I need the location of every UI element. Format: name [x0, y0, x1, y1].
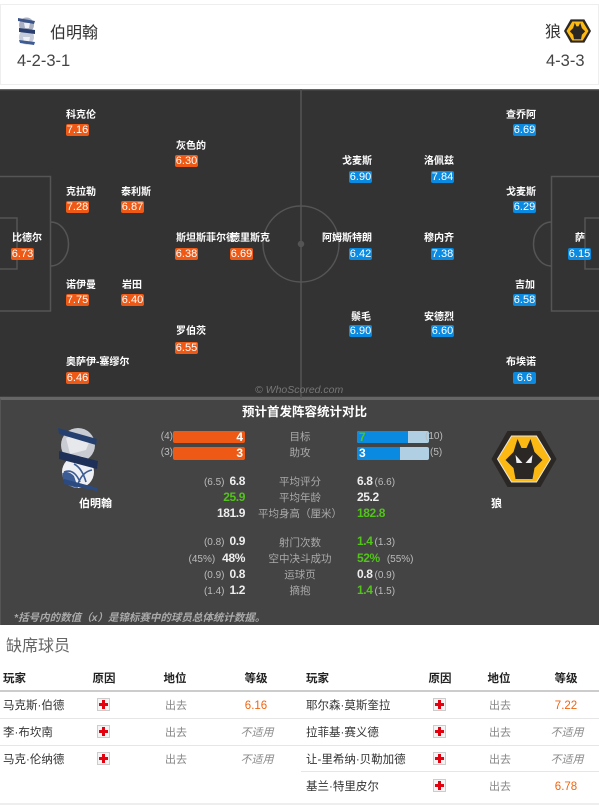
player: 鬃毛: 鬃毛 — [351, 312, 371, 323]
player: 戈麦斯 (left): 6.90 — [350, 171, 371, 183]
player: 阿姆斯特朗: 阿姆斯特朗 — [322, 233, 372, 244]
player: 德里斯克: 德里斯克 — [230, 233, 270, 244]
row home 1: 6.16 — [245, 700, 267, 712]
player: 斯坦斯菲尔德: 斯坦斯菲尔德 — [176, 233, 236, 244]
stat label: 射门次数: 射门次数 — [279, 537, 321, 549]
bar note: goals home: (4) — [161, 431, 173, 442]
player: 洛佩兹: 7.84 — [432, 171, 453, 183]
player: 比德尔 — [11, 232, 42, 260]
team label: away: 狼 — [491, 498, 502, 510]
formation: home: 4-2-3-1 — [17, 52, 70, 70]
table header: rating home: 等级 — [244, 673, 268, 685]
row home 3 — [3, 752, 274, 766]
player: 奥萨伊-塞缪尔: 6.46 — [67, 372, 88, 384]
player: 穆内齐: 7.38 — [432, 248, 453, 260]
bar: goals home: 4 — [236, 430, 243, 444]
player: 戈麦斯 (right): 戈麦斯 — [506, 187, 536, 198]
row home 2: 出去 — [165, 727, 187, 739]
player: 安德烈: 安德烈 — [424, 312, 454, 323]
icon: Wolves crest small — [564, 19, 591, 43]
stat row home: dribbles: (0.9) 0.8 — [204, 567, 245, 581]
player: 阿姆斯特朗: 6.42 — [350, 248, 371, 260]
stat row away: age: 25.2 — [357, 490, 379, 504]
row home 3: 马克·伦纳德 — [3, 754, 64, 766]
row away 1: 耶尔森·莫斯奎拉 — [306, 700, 390, 712]
player: 岩田: 6.40 — [122, 294, 143, 306]
stat label: 平均年龄: 平均年龄 — [279, 492, 321, 504]
player: 戈麦斯 (right) — [506, 186, 536, 213]
row away 2: 不适用 — [550, 727, 584, 739]
player: 克拉勒: 7.28 — [67, 201, 88, 213]
stats title: 预计首发阵容统计对比 — [242, 405, 367, 419]
bar: assists away — [357, 447, 429, 460]
table header: player home: 玩家 — [3, 673, 26, 685]
bar note: assists away: (5) — [430, 447, 442, 458]
bar note: assists home: (3) — [161, 447, 173, 458]
player: 灰色的: 灰色的 — [176, 141, 206, 152]
row home 1: 马克斯·伯德 — [3, 700, 64, 712]
player: 泰利斯: 泰利斯 — [121, 187, 151, 198]
team label: home: 伯明翰 — [79, 498, 112, 510]
row home 1 — [3, 698, 267, 712]
watermark: © WhoScored.com — [255, 384, 343, 396]
player: 阿姆斯特朗 — [322, 232, 372, 260]
panel: match header — [0, 4, 599, 85]
row away 3: 出去 — [489, 754, 511, 766]
row away 2 — [300, 726, 599, 740]
player: 诺伊曼 — [66, 279, 96, 306]
stat row away: shots: 1.4(1.3) — [357, 534, 395, 548]
stat label: 平均评分: 平均评分 — [279, 476, 321, 488]
bar: assists home — [173, 447, 245, 460]
stat row away: tackles: 1.4(1.5) — [357, 583, 395, 597]
player: 萨: 6.15 — [569, 248, 590, 260]
row away 3: 让-里希纳·贝勒加德 — [306, 754, 406, 766]
stat row home: age: 25.9 — [223, 490, 245, 504]
row away 2: 拉菲基·赛义德 — [306, 727, 379, 739]
player: 罗伯茨: 6.55 — [176, 342, 197, 354]
row home 1: 出去 — [165, 700, 187, 712]
stat label: 助攻: 助攻 — [290, 447, 310, 459]
player: 岩田 — [121, 279, 144, 306]
player: 灰色的 — [175, 140, 206, 167]
stat label: 平均身高: 平均身高（厘米） — [258, 508, 342, 520]
player: 穆内齐 — [424, 232, 454, 260]
row away 4: 基兰·特里皮尔 — [306, 781, 379, 793]
team name: away: 狼 — [545, 24, 561, 41]
table header: reason away: 原因 — [428, 673, 452, 685]
row away 1 — [300, 699, 599, 713]
player: 罗伯茨: 罗伯茨 — [176, 326, 206, 337]
player: 查乔阿 — [506, 109, 536, 136]
row home 3: 不适用 — [240, 754, 274, 766]
player: 科克伦 — [66, 109, 96, 136]
row away 2: 出去 — [489, 727, 511, 739]
player: 科克伦: 7.16 — [67, 124, 88, 136]
player: 比德尔: 比德尔 — [12, 233, 42, 244]
row away 3 — [300, 753, 599, 767]
player: 泰利斯 — [121, 186, 151, 213]
player: 安德烈 — [424, 311, 454, 337]
row away 4: 出去 — [489, 781, 511, 793]
bar note: goals away: (10) — [425, 431, 443, 442]
stat row home: rating: (6.5) 6.8 — [204, 474, 245, 488]
row away 3: 不适用 — [550, 754, 584, 766]
player: 岩田: 岩田 — [122, 280, 142, 291]
bar: goals home — [173, 431, 245, 443]
player: 奥萨伊-塞缪尔 — [66, 356, 129, 384]
table header: rating away: 等级 — [554, 673, 578, 685]
icon: Birmingham crest large — [58, 428, 98, 491]
player: 布埃诺: 布埃诺 — [506, 357, 536, 368]
stat row home: shots: (0.8) 0.9 — [204, 534, 245, 548]
row away 1: 出去 — [489, 700, 511, 712]
player: 吉加 — [513, 279, 536, 306]
player: 克拉勒: 克拉勒 — [66, 187, 96, 198]
player: 布埃诺: 6.6 — [517, 372, 532, 384]
player: 诺伊曼: 诺伊曼 — [66, 280, 96, 291]
stat row away: dribbles: 0.8(0.9) — [357, 567, 395, 581]
player: 泰利斯: 6.87 — [122, 201, 143, 213]
table header: position away: 地位 — [488, 673, 510, 685]
stat row home: aerial: (45%) 48% — [188, 551, 245, 565]
row home 2: 不适用 — [240, 727, 274, 739]
stat label: 目标: 目标 — [290, 431, 310, 443]
player: 吉加: 吉加 — [515, 280, 535, 291]
stat row away: aerial: 52% (55%) — [357, 551, 414, 565]
row home 3: 出去 — [165, 754, 187, 766]
pitch markings — [0, 89, 599, 398]
player: 查乔阿: 查乔阿 — [506, 110, 536, 121]
player: 吉加: 6.58 — [514, 294, 535, 306]
row away 4: 6.78 — [555, 781, 577, 793]
player: 灰色的: 6.30 — [176, 155, 197, 167]
stat row home: height: 181.9 — [217, 506, 245, 520]
icon: Birmingham crest small — [18, 18, 35, 45]
player: 比德尔: 6.73 — [12, 248, 33, 260]
player: 诺伊曼: 7.75 — [67, 294, 88, 306]
player: 萨: 萨 — [575, 233, 585, 244]
bar: goals away — [357, 431, 429, 443]
row home 2: 李·布坎南 — [3, 727, 53, 739]
player: 德里斯克 — [230, 232, 270, 260]
stat label: 摘抱: 摘抱 — [290, 585, 310, 597]
player: 鬃毛: 6.90 — [350, 325, 371, 337]
row home 2 — [3, 725, 274, 739]
stat row away: height: 182.8 — [357, 506, 385, 520]
player: 戈麦斯 (right): 6.29 — [514, 201, 535, 213]
player: 奥萨伊-塞缪尔: 奥萨伊-塞缪尔 — [66, 357, 129, 368]
player: 查乔阿: 6.69 — [514, 124, 535, 136]
player: 萨 — [568, 232, 591, 260]
player: 布埃诺 — [506, 356, 536, 384]
player: 斯坦斯菲尔德 — [175, 232, 236, 260]
table header: position home: 地位 — [164, 673, 186, 685]
player: 罗伯茨 — [175, 325, 206, 354]
team name: home: 伯明翰 — [50, 25, 98, 42]
row away 4 — [300, 780, 599, 794]
player: 德里斯克: 6.69 — [231, 248, 252, 260]
player: 安德烈: 6.60 — [432, 325, 453, 337]
heading: missing players: 缺席球员 — [6, 638, 70, 655]
stat row away: rating: 6.8(6.6) — [357, 474, 395, 488]
panel: pitch — [0, 89, 599, 398]
footnote: *括号内的数值（x）是锦标赛中的球员总体统计数据。 — [14, 612, 265, 624]
icon: Wolves crest large — [492, 431, 556, 487]
bar: assists home: 3 — [236, 446, 243, 460]
row away 1: 7.22 — [555, 700, 577, 712]
player: 斯坦斯菲尔德: 6.38 — [176, 248, 197, 260]
table header: reason home: 原因 — [92, 673, 116, 685]
player: 洛佩兹: 洛佩兹 — [424, 156, 454, 167]
player: 戈麦斯 (left): 戈麦斯 — [342, 156, 372, 167]
stat label: 空中决斗成功: 空中决斗成功 — [268, 553, 332, 565]
player: 穆内齐: 穆内齐 — [424, 233, 454, 244]
table header: player away: 玩家 — [306, 673, 329, 685]
panel: lineup stats comparison — [0, 398, 599, 625]
player: 洛佩兹 — [424, 155, 454, 183]
formation: away: 4-3-3 — [546, 52, 585, 70]
player: 克拉勒 — [66, 186, 96, 213]
stat label: 运球页: 运球页 — [284, 569, 316, 581]
player: 科克伦: 科克伦 — [66, 110, 96, 121]
player: 鬃毛 — [349, 311, 372, 337]
stat row home: tackles: (1.4) 1.2 — [204, 583, 245, 597]
player: 戈麦斯 (left) — [342, 155, 372, 183]
